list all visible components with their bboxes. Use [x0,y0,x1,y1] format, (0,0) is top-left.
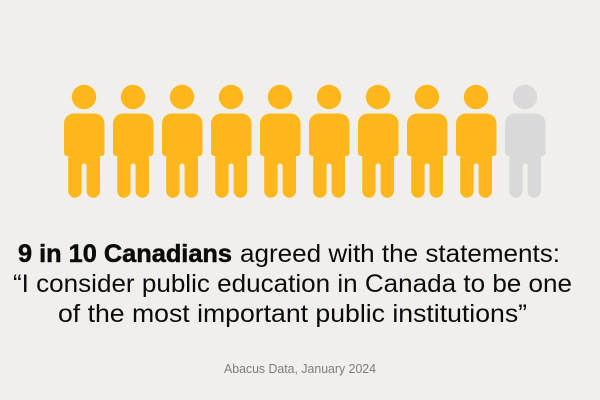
source note: Abacus Data, January 2024 [224,362,376,376]
line 2: “I consider public education in Canada to be one [13,270,572,298]
person 8 highlighted [407,85,448,198]
person 1 highlighted [64,85,105,198]
line 1 bold lead-in: 9 in 10 Canadians [18,240,232,268]
person 4 highlighted [211,85,252,198]
person 10 grey [505,85,546,198]
line 1 regular: agreed with the statements: [240,240,560,268]
person 2 highlighted [113,85,154,198]
line 3: of the most important public institutions” [58,300,527,328]
headline statement [13,240,572,328]
person 5 highlighted [260,85,300,198]
person 6 highlighted [309,85,350,198]
pictogram row: 9 of 10 people highlighted [64,85,546,198]
person 3 highlighted [162,85,202,198]
person 9 highlighted [456,85,496,198]
person 7 highlighted [358,85,398,198]
